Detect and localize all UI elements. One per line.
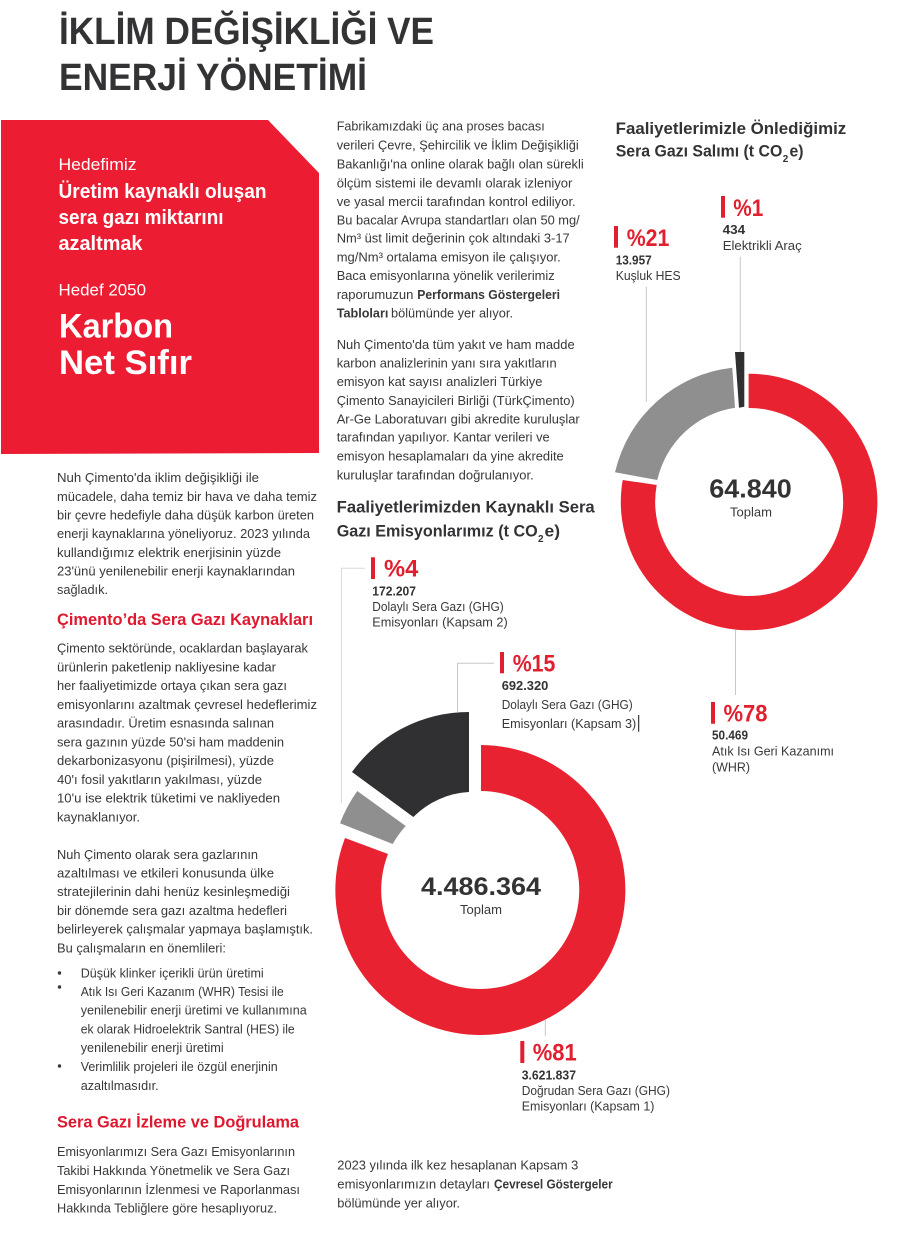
label: scope 2 4% <box>371 556 508 630</box>
text block: stack data: Fabrikamızdaki üç ana proses bacası <box>337 119 545 134</box>
bullet list: yenilenebilir enerji üretimi ve kullanımına <box>81 1003 307 1018</box>
bullet list: Düşük klinker içerikli ürün üretimi <box>81 966 264 981</box>
text block: reduction efforts <box>57 847 313 955</box>
segment: WHR 78% <box>621 374 877 630</box>
text block: cement sources: her faaliyetimizde ortaya çıkan sera gazı <box>57 678 287 693</box>
label: scope 1 81%: Emisyonları (Kapsam 1) <box>522 1099 654 1114</box>
label: scope 2 4%: %4 <box>384 556 419 583</box>
bullet list: yenilenebilir enerji üretimi <box>81 1040 224 1055</box>
text block: reduction efforts: azaltılması ve etkileri konusunda ülke <box>57 866 274 881</box>
text block: stack data: Nm³ üst limit değerinin çok altındaki 3-17 <box>337 231 570 246</box>
text block: reduction efforts: bir dönemde sera gazı azaltma hedefleri <box>57 903 287 918</box>
leader line: scope 3 <box>458 663 494 712</box>
text block: carbon analyses: Nuh Çimento'da tüm yakıt ve ham madde <box>337 337 575 352</box>
text block: carbon analyses <box>337 337 580 482</box>
total value: 4.486.364 <box>421 873 541 901</box>
2050 label: Hedef 2050 <box>58 281 146 300</box>
text block: cement sources: 40'ı fosil yakıtların yakılması, yüzde <box>57 772 262 787</box>
text block: cement sources: ürünlerin paketlenip nakliyesine kadar <box>57 660 277 675</box>
donut chart: operational emissions <box>335 712 625 1035</box>
text block: intro: mücadele, daha temiz bir hava ve daha temiz <box>57 489 317 504</box>
panel: target callout <box>1 120 319 454</box>
total value: 64.840 <box>709 473 792 503</box>
text block: scope 3 note: bölümünde yer alıyor. <box>337 1195 460 1210</box>
2050 statement <box>59 307 192 382</box>
text block: stack data: ve yasal mercii tarafından kontrol ediliyor. <box>337 194 576 209</box>
text block: stack data: mg/Nm³ ortalama emisyon ile çalışıyor. <box>337 250 561 265</box>
label: electric vehicle 1%: 434 <box>723 222 746 237</box>
leader line: scope 2 <box>342 568 365 803</box>
text block: stack data: Baca emisyonlarına yönelik verilerimiz <box>337 268 555 283</box>
label: Kuşluk HES 21%: 13.957 <box>616 252 652 267</box>
label: electric vehicle 1%: %1 <box>733 195 763 222</box>
bullet list: azaltılmasıdır. <box>81 1078 159 1093</box>
text block: carbon analyses: karbon analizlerinin yanı sıra yakıtların <box>337 356 557 371</box>
text block: stack data: verileri Çevre, Şehircilik ve İklim Değişikliği <box>337 137 579 152</box>
label: WHR 78% <box>711 700 834 774</box>
label: scope 1 81%: %81 <box>533 1040 577 1067</box>
bullet list: Atık Isı Geri Kazanım (WHR) Tesisi ile <box>81 984 284 999</box>
target statement: Üretim kaynaklı oluşan <box>58 180 266 203</box>
2050 statement: Karbon <box>59 307 173 345</box>
text block: reduction efforts: stratejilerinin dahi henüz kesinleşmediği <box>57 884 290 899</box>
text block: carbon analyses: emisyon kat sayısı analizleri Türkiye <box>337 374 542 389</box>
heading: emissions chart <box>337 498 596 545</box>
label: WHR 78%: Atık Isı Geri Kazanımı <box>712 744 834 758</box>
leader line: electric vehicle <box>739 257 741 352</box>
text block: stack data <box>337 119 584 321</box>
leader line: Kuşluk HES <box>645 287 647 402</box>
text block: reduction efforts: Nuh Çimento olarak sera gazlarının <box>57 847 258 862</box>
text block: cement sources: 10'u ise elektrik tüketimi ve nakliyeden <box>57 791 280 806</box>
target statement: azaltmak <box>58 233 143 255</box>
text block: stack data: raporumuzun <box>337 287 413 302</box>
text block: stack data: Performans Göstergeleri <box>417 287 560 302</box>
text block: scope 3 note: Çevresel Göstergeler <box>494 1177 613 1192</box>
text block: cement sources <box>57 641 317 824</box>
text block: stack data: Bu bacalar Avrupa standartları olan 50 mg/ <box>337 212 580 227</box>
text block: stack data: bölümünde yer alıyor. <box>391 306 513 321</box>
bullet list: Verimlilik projeleri ile özgül enerjinin <box>81 1059 278 1074</box>
text block: carbon analyses: tarafından yapılıyor. Kantar verileri ve <box>337 430 550 445</box>
text block: cement sources: sera gazının yüzde 50'si ham maddenin <box>57 735 284 750</box>
text block: carbon analyses: Ar-Ge Laboratuvarı gibi akredite kuruluşlar <box>337 411 580 426</box>
text block: monitoring: Emisyonlarımızı Sera Gazı Emisyonlarının <box>57 1144 295 1159</box>
target statement <box>58 180 266 255</box>
title <box>59 9 434 99</box>
text block: monitoring: Emisyonlarının İzlenmesi ve Raporlanması <box>57 1182 300 1197</box>
label: scope 2 4%: Dolaylı Sera Gazı (GHG) <box>372 599 504 614</box>
label: Kuşluk HES 21%: %21 <box>627 225 669 252</box>
text block: intro: enerji kaynaklarına yöneliyoruz. 2023 yılında <box>57 526 311 541</box>
label: scope 3 15%: Dolaylı Sera Gazı (GHG) <box>502 697 633 712</box>
text block: cement sources: dekarbonizasyonu (pişirilmesi), yüzde <box>57 753 274 768</box>
text block: carbon analyses: Çimento Sanayicileri Birliği (TürkÇimento) <box>337 393 575 408</box>
label: electric vehicle 1% <box>721 195 802 253</box>
heading: emissions chart: Gazı Emisyonlarımız (t CO <box>337 523 538 541</box>
heading: cement sources: Çimento’da Sera Gazı Kaynakları <box>57 610 313 629</box>
label: scope 1 81% <box>520 1040 670 1114</box>
leader line: scope 1 <box>544 1020 546 1036</box>
heading: emissions chart: Faaliyetlerimizden Kaynaklı Sera <box>337 498 596 516</box>
text block: intro: kullandığımız elektrik enerjisinin yüzde <box>57 545 281 560</box>
target label: Hedefimiz <box>58 155 136 174</box>
text block: stack data: Tabloları <box>337 306 388 321</box>
text block: intro: Nuh Çimento'da iklim değişikliği ile <box>57 470 259 485</box>
heading: emissions chart: 2 <box>538 534 544 545</box>
text block: cement sources: emisyonlarını azaltmak çevresel hedeflerimiz <box>57 697 317 712</box>
label: electric vehicle 1%: Elektrikli Araç <box>723 238 802 253</box>
heading: monitoring: Sera Gazı İzleme ve Doğrulama <box>57 1113 300 1132</box>
text block: stack data: ölçüm sistemi ile devamlı olarak izleniyor <box>337 175 573 190</box>
text block: carbon analyses: kuruluşlar tarafından doğrulanıyor. <box>337 467 534 482</box>
text block: intro: bir çevre hedefiyle daha düşük karbon üreten <box>57 508 314 522</box>
text block: intro <box>57 470 317 597</box>
text block: reduction efforts: belirleyerek çalışmalar yapmaya başlamıştık. <box>57 922 313 937</box>
label: WHR 78%: 50.469 <box>712 728 748 742</box>
text block: intro: sağladık. <box>57 582 108 597</box>
segment: scope 2 4% <box>340 791 406 844</box>
label: scope 3 15%: Emisyonları (Kapsam 3) <box>502 716 636 731</box>
leader line: WHR <box>734 630 736 695</box>
label: Kuşluk HES 21% <box>614 225 681 283</box>
text block: intro: 23'ünü yenilenebilir enerji kaynaklarından <box>57 564 295 579</box>
donut chart: avoided emissions <box>615 352 877 630</box>
segment: scope 1 81% <box>335 745 625 1035</box>
label: scope 3 15%: 692.320 <box>502 678 548 693</box>
bullet list <box>58 966 307 1093</box>
text block: cement sources: Çimento sektöründe, ocaklardan başlayarak <box>57 641 308 656</box>
total label: Toplam <box>730 505 772 520</box>
label: WHR 78%: %78 <box>724 700 768 728</box>
text block: carbon analyses: emisyon hesaplamaları da yine akredite <box>337 449 564 464</box>
label: scope 1 81%: Doğrudan Sera Gazı (GHG) <box>522 1083 670 1098</box>
target statement: sera gazı miktarını <box>58 207 224 229</box>
text block: scope 3 note: emisyonlarımızın detayları <box>337 1177 490 1192</box>
segment: scope 3 15% <box>352 712 469 817</box>
heading: avoided emissions chart: Sera Gazı Salımı (t CO <box>616 143 782 161</box>
text block: monitoring <box>57 1144 300 1216</box>
text block: cement sources: kaynaklanıyor. <box>57 809 140 824</box>
bullet list: ek olarak Hidroelektrik Santral (HES) ile <box>81 1022 295 1037</box>
text block: scope 3 note <box>337 1157 613 1210</box>
label: scope 3 15%: %15 <box>513 651 555 678</box>
title: İKLİM DEĞİŞİKLİĞİ VE <box>59 9 434 53</box>
label: scope 1 81%: 3.621.837 <box>522 1067 576 1082</box>
2050 statement: Net Sıfır <box>59 344 192 382</box>
segment: Kuşluk HES 21% <box>615 368 735 480</box>
label: scope 3 15% <box>500 651 639 732</box>
segment: electric vehicle 1% <box>735 352 744 408</box>
text block: stack data: Bakanlığı'na online olarak bağlı olan sürekli <box>337 156 584 171</box>
label: scope 2 4%: 172.207 <box>372 584 416 599</box>
heading: avoided emissions chart: 2 <box>783 154 789 165</box>
heading: avoided emissions chart: Faaliyetlerimizle Önlediğimiz <box>616 119 846 138</box>
heading: avoided emissions chart <box>616 119 846 165</box>
text block: monitoring: Takibi Hakkında Yönetmelik ve Sera Gazı <box>57 1163 290 1178</box>
text block: reduction efforts: Bu çalışmaların en önemlileri: <box>57 940 226 955</box>
label: WHR 78%: (WHR) <box>712 760 750 774</box>
label: Kuşluk HES 21%: Kuşluk HES <box>616 268 681 283</box>
title: ENERJİ YÖNETİMİ <box>59 56 367 99</box>
text block: cement sources: arasındadır. Üretim esnasında salınan <box>57 716 274 731</box>
text block: monitoring: Hakkında Tebliğlere göre hesaplıyoruz. <box>57 1201 277 1216</box>
total label: Toplam <box>460 902 502 917</box>
text block: scope 3 note: 2023 yılında ilk kez hesaplanan Kapsam 3 <box>337 1157 578 1172</box>
heading: emissions chart: e) <box>544 523 560 541</box>
label: scope 2 4%: Emisyonları (Kapsam 2) <box>372 615 508 630</box>
heading: avoided emissions chart: e) <box>790 143 804 161</box>
